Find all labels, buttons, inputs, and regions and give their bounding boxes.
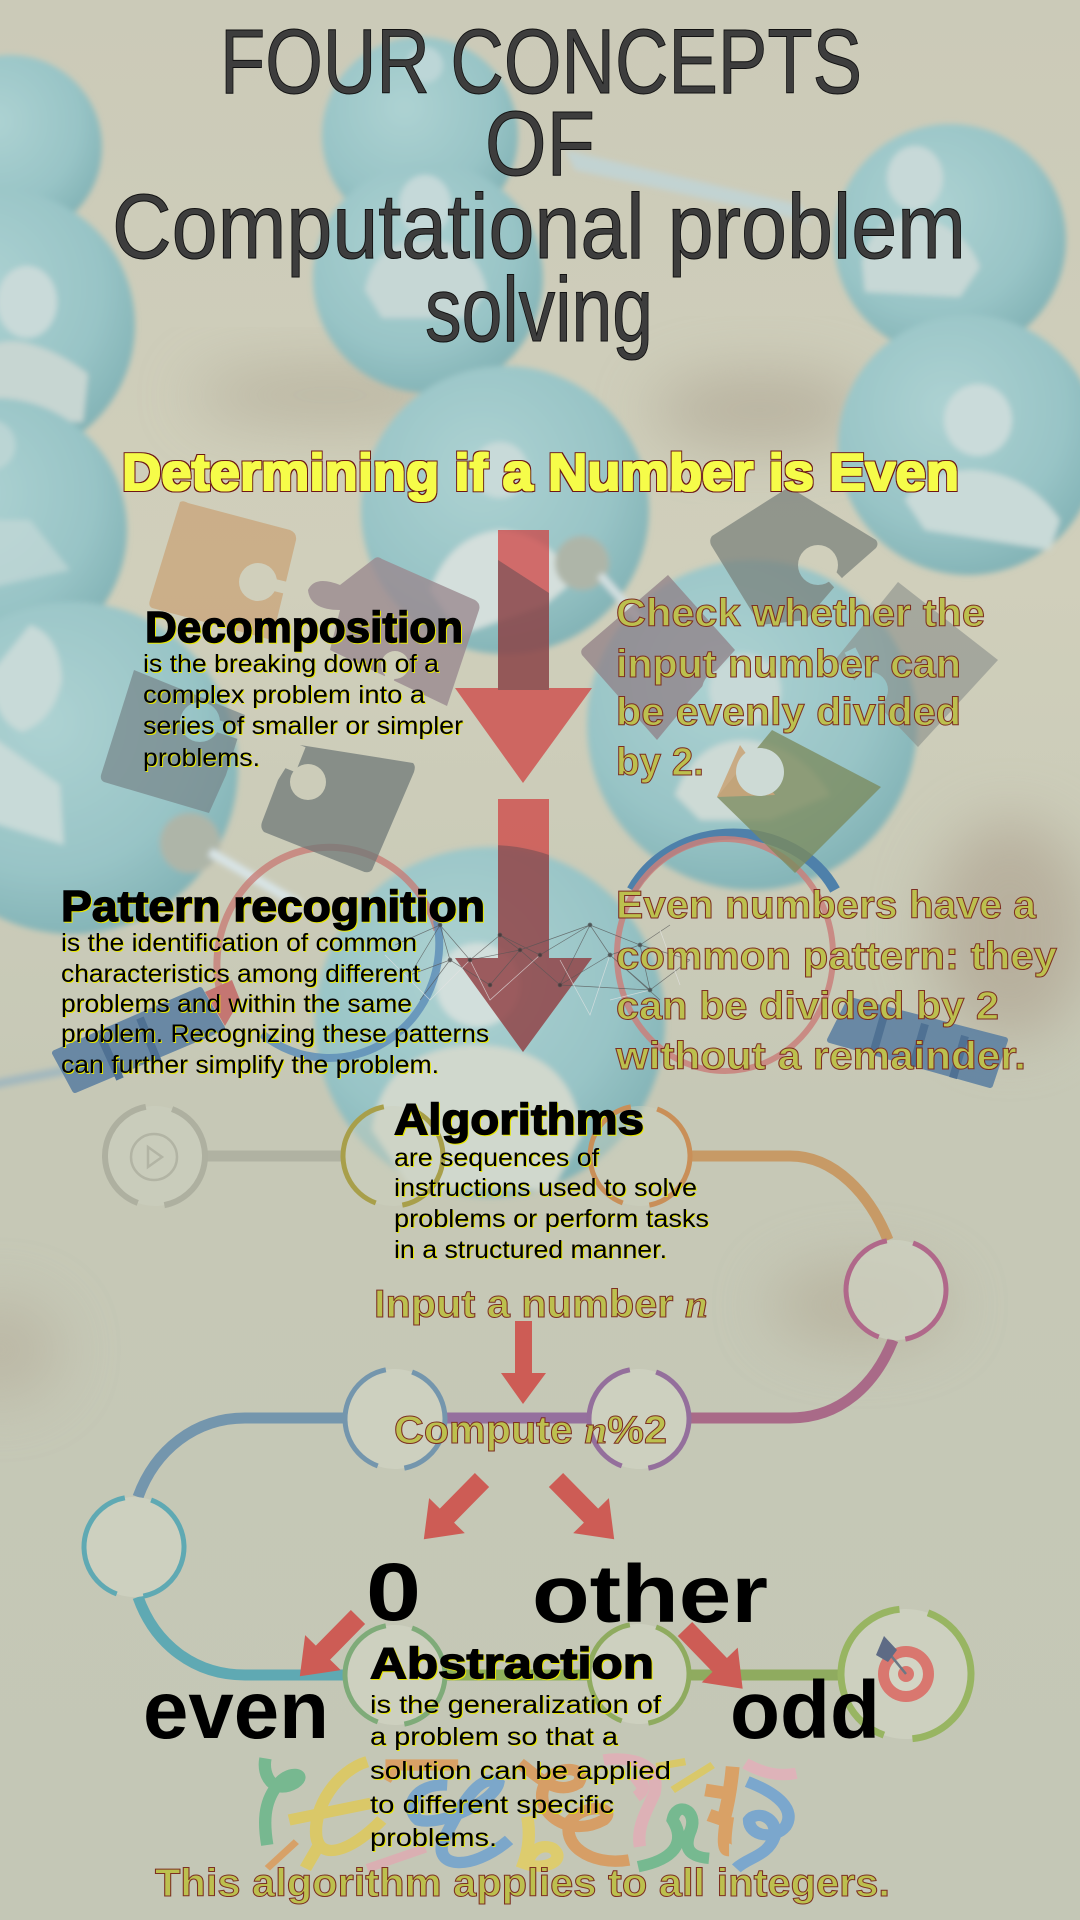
text: algorithms definition: in a structured manner. [394, 1236, 667, 1264]
text: abstraction definition: a problem so that a [370, 1723, 618, 1751]
text: decomposition definition: series of smaller or simpler [143, 712, 463, 740]
text: result other: other [532, 1549, 768, 1640]
subtitle: Determining if a Number is Even [122, 444, 959, 502]
arrow: other to odd [667, 1612, 761, 1706]
text: abstraction definition: is the generalization of [370, 1691, 661, 1719]
puzzle pieces: right group [581, 487, 998, 873]
text: decomposition example: input number can [616, 643, 961, 686]
text: pattern recognition definition: is the identification of common [61, 929, 417, 957]
text: decomposition definition: is the breaking down of a [143, 650, 439, 678]
text: algorithms definition: instructions used to solve [394, 1174, 697, 1202]
panel: algorithms [394, 1095, 709, 1264]
arrow: input to compute [501, 1321, 546, 1404]
title: OF [485, 93, 595, 195]
text: compute step: Compute n%2 [394, 1409, 667, 1452]
text: abstraction definition: solution can be applied [370, 1757, 671, 1785]
text: abstraction definition: problems. [370, 1824, 497, 1852]
text: decomposition definition: problems. [143, 744, 260, 772]
text: decomposition example [616, 592, 985, 784]
network mesh [385, 923, 690, 1015]
text: pattern recognition definition: can further simplify the problem. [61, 1051, 439, 1079]
heading: abstraction: Abstraction [370, 1639, 654, 1688]
text: pattern recognition definition [61, 929, 489, 1079]
text: algorithms definition: are sequences of [394, 1144, 599, 1172]
panel: abstraction [370, 1639, 671, 1852]
arrow: compute to other [538, 1462, 632, 1557]
text: algorithms definition: problems or perform tasks [394, 1205, 709, 1233]
text: decomposition example: by 2. [616, 741, 704, 784]
text: abstraction definition [370, 1691, 671, 1852]
arrow: pattern recognition down [455, 799, 592, 1052]
icon: magnifying glasses [55, 834, 1005, 1090]
panel: pattern recognition [61, 882, 489, 1079]
process path diagram [70, 1092, 989, 1757]
text: decomposition example: be evenly divided [616, 691, 961, 734]
text: pattern recognition example [615, 884, 1057, 1078]
text: decomposition definition [143, 650, 463, 772]
icon: target and dart [876, 1636, 934, 1702]
text: pattern recognition example: Even numbers have a [616, 884, 1036, 927]
text: pattern recognition definition: characteristics among different [61, 960, 420, 988]
title: solving [425, 259, 653, 361]
colorful squiggles [265, 1758, 796, 1868]
text: decomposition example: Check whether the [616, 592, 985, 635]
heading: decomposition: Decomposition [145, 603, 463, 652]
title: FOUR CONCEPTS [220, 11, 862, 113]
panel: decomposition [143, 603, 463, 772]
heading: algorithms: Algorithms [394, 1095, 644, 1144]
puzzle pieces: left group [101, 501, 480, 872]
text: result zero: 0 [366, 1547, 421, 1638]
text: pattern recognition example: common pattern: they [616, 935, 1057, 978]
arrow: decomposition down [455, 530, 592, 783]
text: pattern recognition definition: problem. Recognizing these patterns [61, 1020, 489, 1048]
text: pattern recognition example: without a remainder. [615, 1035, 1026, 1078]
heading: pattern recognition: Pattern recognition [61, 882, 485, 931]
text: conclusion: This algorithm applies to all integers. [155, 1862, 890, 1905]
text: decomposition definition: complex problem into a [143, 681, 425, 709]
text: even: even [143, 1665, 329, 1756]
text: abstraction definition: to different specific [370, 1791, 614, 1819]
text: pattern recognition definition: problems and within the same [61, 990, 412, 1018]
text: input step: Input a number n [374, 1283, 708, 1326]
text: odd: odd [730, 1665, 880, 1756]
text: pattern recognition example: can be divided by 2 [616, 985, 999, 1028]
text: algorithms definition [394, 1144, 709, 1264]
arrow: compute to 0 [406, 1462, 500, 1557]
title: Computational problem [112, 176, 966, 278]
arrow: 0 to even [282, 1599, 376, 1694]
title [112, 11, 966, 361]
